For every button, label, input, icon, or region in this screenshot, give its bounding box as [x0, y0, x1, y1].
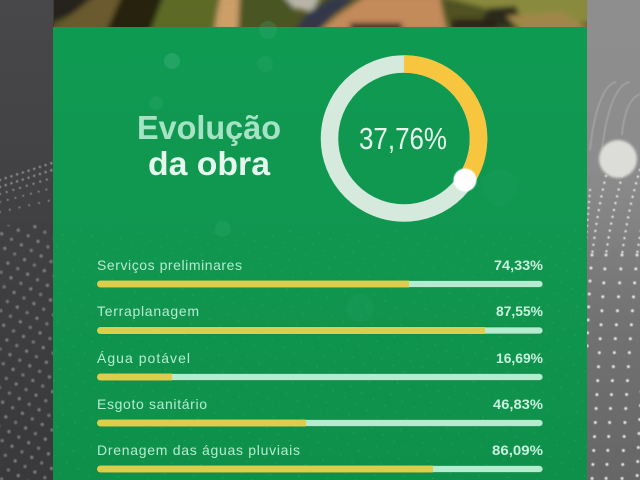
heading: Evolução da obra: Evolução: [137, 109, 281, 146]
progress row: Água potável: 16,69%: [496, 351, 543, 366]
progress row: Esgoto sanitário: [97, 396, 543, 426]
progress row: Serviços preliminares: [97, 257, 543, 288]
decorative bokeh: [149, 21, 518, 322]
progress row: Serviços preliminares: Serviços preliminares: [97, 257, 242, 273]
progress row: Terraplanagem: Terraplanagem: [97, 303, 199, 319]
heading: Evolução da obra: da obra: [148, 145, 271, 182]
donut chart: overall progress: [330, 64, 479, 213]
progress row: Drenagem das águas pluviais: 86,09%: [492, 443, 543, 458]
background: right grey panel with dotted arcs: [586, 0, 640, 480]
progress row: Água potável: [97, 350, 543, 380]
progress row: Drenagem das águas pluviais: [97, 442, 543, 472]
progress row: Serviços preliminares: 74,33%: [494, 258, 543, 273]
heading: Evolução da obra: [137, 109, 281, 182]
background: left dark panel: [0, 0, 54, 480]
progress row: Esgoto sanitário: Esgoto sanitário: [97, 396, 207, 412]
progress row: Esgoto sanitário: 46,83%: [493, 397, 543, 412]
donut handle: [454, 168, 476, 192]
donut value: 37,76%: [359, 121, 447, 156]
progress row: Drenagem das águas pluviais: Drenagem das águas pluviais: [97, 442, 300, 458]
progress row: Terraplanagem: 87,55%: [496, 304, 543, 319]
progress row: Terraplanagem: [97, 303, 543, 334]
progress row: Água potável: Água potável: [97, 350, 190, 366]
panel: green progress card: [53, 21, 587, 480]
photo strip: aerial view of the works: [54, 0, 587, 27]
